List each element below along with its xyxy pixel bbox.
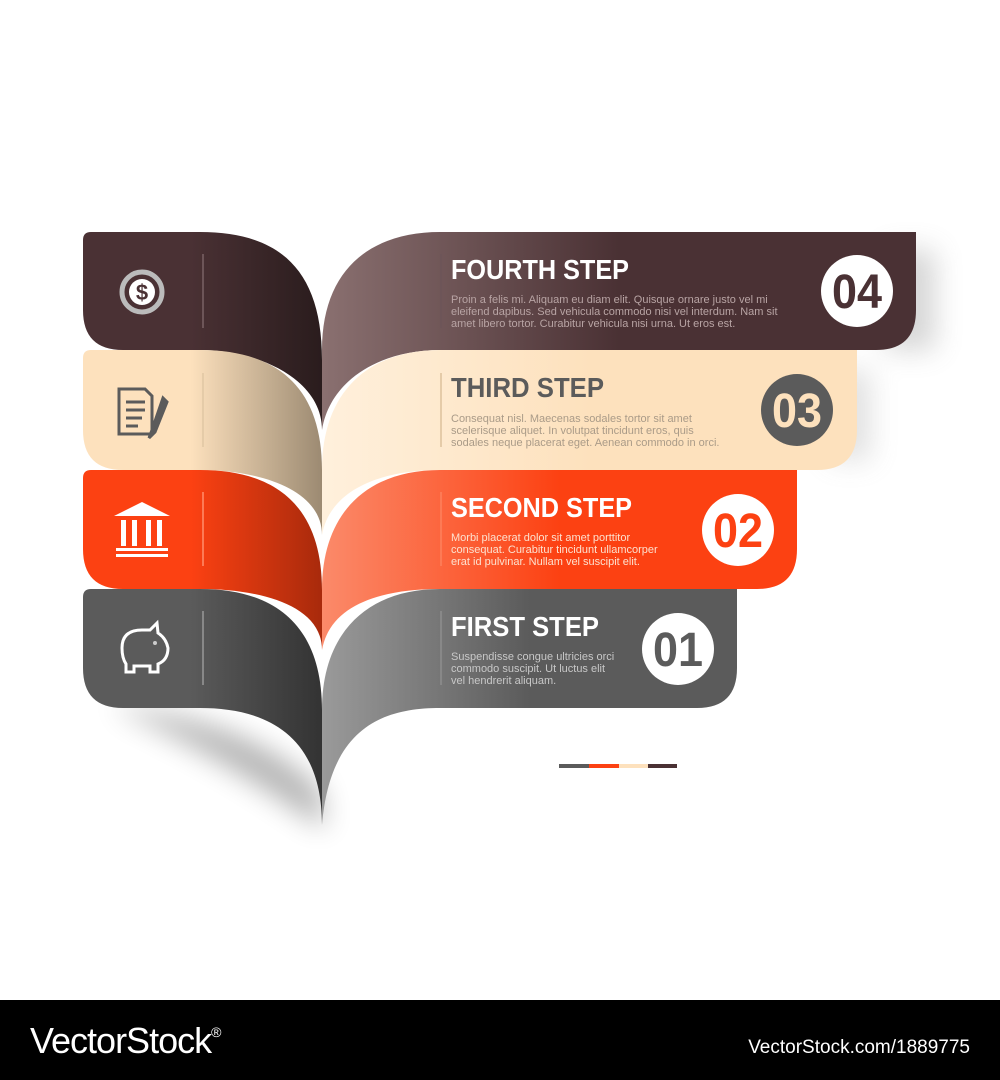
icon: piggy bank (122, 623, 168, 672)
band: second step: 02 (713, 505, 763, 558)
icon: dollar cycle (122, 272, 162, 312)
band: first step: vel hendrerit aliquam. (451, 675, 556, 687)
icon: document (119, 389, 167, 438)
icon: dollar cycle: $ (136, 280, 148, 305)
footer (0, 1000, 1000, 1080)
band: fourth step: Proin a felis mi. Aliquam eu diam elit. Quisque ornare justo vel mi (451, 294, 768, 306)
band: fourth step: 04 (832, 266, 882, 319)
band: first step: FIRST STEP (451, 611, 599, 642)
icon: bank (114, 502, 170, 557)
band: second step (83, 470, 797, 650)
band: fourth step: amet libero tortor. Curabitur vehicula nisi urna. Ut eros est. (451, 318, 735, 330)
band: second step: erat id pulvinar. Nullam vel suscipit elit. (451, 556, 640, 568)
band: third step (83, 350, 857, 535)
band: first step: Suspendisse congue ultricies orci (451, 651, 614, 663)
band: third step: 03 (772, 385, 822, 438)
legend bar (559, 764, 677, 768)
band: fourth step: FOURTH STEP (451, 254, 629, 285)
band: third step: Consequat nisl. Maecenas sodales tortor sit amet (451, 413, 692, 425)
shadow (110, 250, 935, 830)
band: third step: sodales neque placerat eget. Aenean commodo in orci. (451, 437, 719, 449)
footer: ® (211, 1024, 222, 1040)
band: first step: commodo suscipit. Ut luctus elit (451, 663, 605, 675)
band: second step: SECOND STEP (451, 492, 632, 523)
band: first step (83, 589, 737, 825)
band: third step: THIRD STEP (451, 372, 604, 403)
band: third step: scelerisque aliquet. In volutpat tincidunt eros, quis (451, 425, 694, 437)
band: first step: 01 (653, 624, 703, 677)
footer: VectorStock (30, 1020, 211, 1061)
band: second step: Morbi placerat dolor sit amet porttitor (451, 532, 630, 544)
band: second step: consequat. Curabitur tincidunt ullamcorper (451, 544, 658, 556)
band: fourth step: eleifend dapibus. Sed vehicula commodo nisi vel interdum. Nam sit (451, 306, 778, 318)
footer: VectorStock.com/1889775 (748, 1037, 970, 1058)
band: fourth step (83, 232, 916, 430)
